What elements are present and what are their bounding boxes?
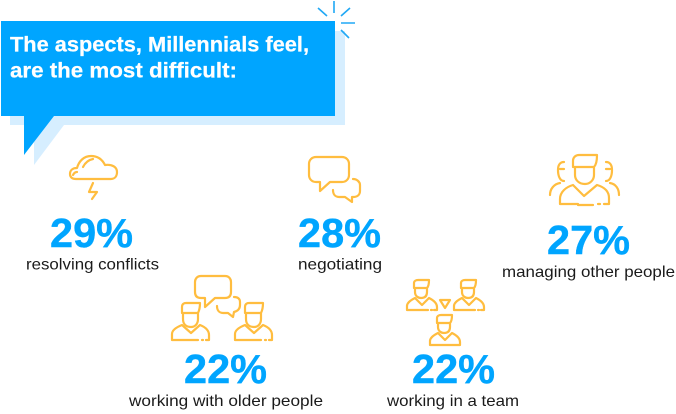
icon: team of three xyxy=(407,280,484,345)
icon: speech bubbles xyxy=(309,157,360,202)
title: The aspects, Millennials feel, xyxy=(10,32,309,56)
item: resolving conflicts xyxy=(26,156,159,274)
icon: group of people xyxy=(550,155,619,205)
value: 28% xyxy=(298,210,381,256)
label: managing other people xyxy=(502,264,675,281)
callout shadow xyxy=(10,31,345,165)
label: working in a team xyxy=(386,393,519,410)
title xyxy=(10,32,309,82)
item: working in a team xyxy=(386,280,519,410)
label: working with older people xyxy=(128,393,323,410)
value: 22% xyxy=(184,346,267,392)
value: 27% xyxy=(547,217,630,263)
label: negotiating xyxy=(298,256,382,274)
icon: spark lines xyxy=(318,1,355,38)
icon: storm cloud xyxy=(70,156,117,199)
callout: heading speech bubble xyxy=(1,21,345,165)
callout bubble xyxy=(1,21,335,155)
value: 22% xyxy=(412,346,495,392)
value: 29% xyxy=(50,210,133,256)
icon: two people talking xyxy=(172,276,272,340)
label: resolving conflicts xyxy=(26,256,159,274)
item: negotiating xyxy=(298,157,382,274)
title: are the most difficult: xyxy=(10,58,237,82)
item: working with older people xyxy=(128,276,323,410)
item: managing other people xyxy=(502,155,675,281)
